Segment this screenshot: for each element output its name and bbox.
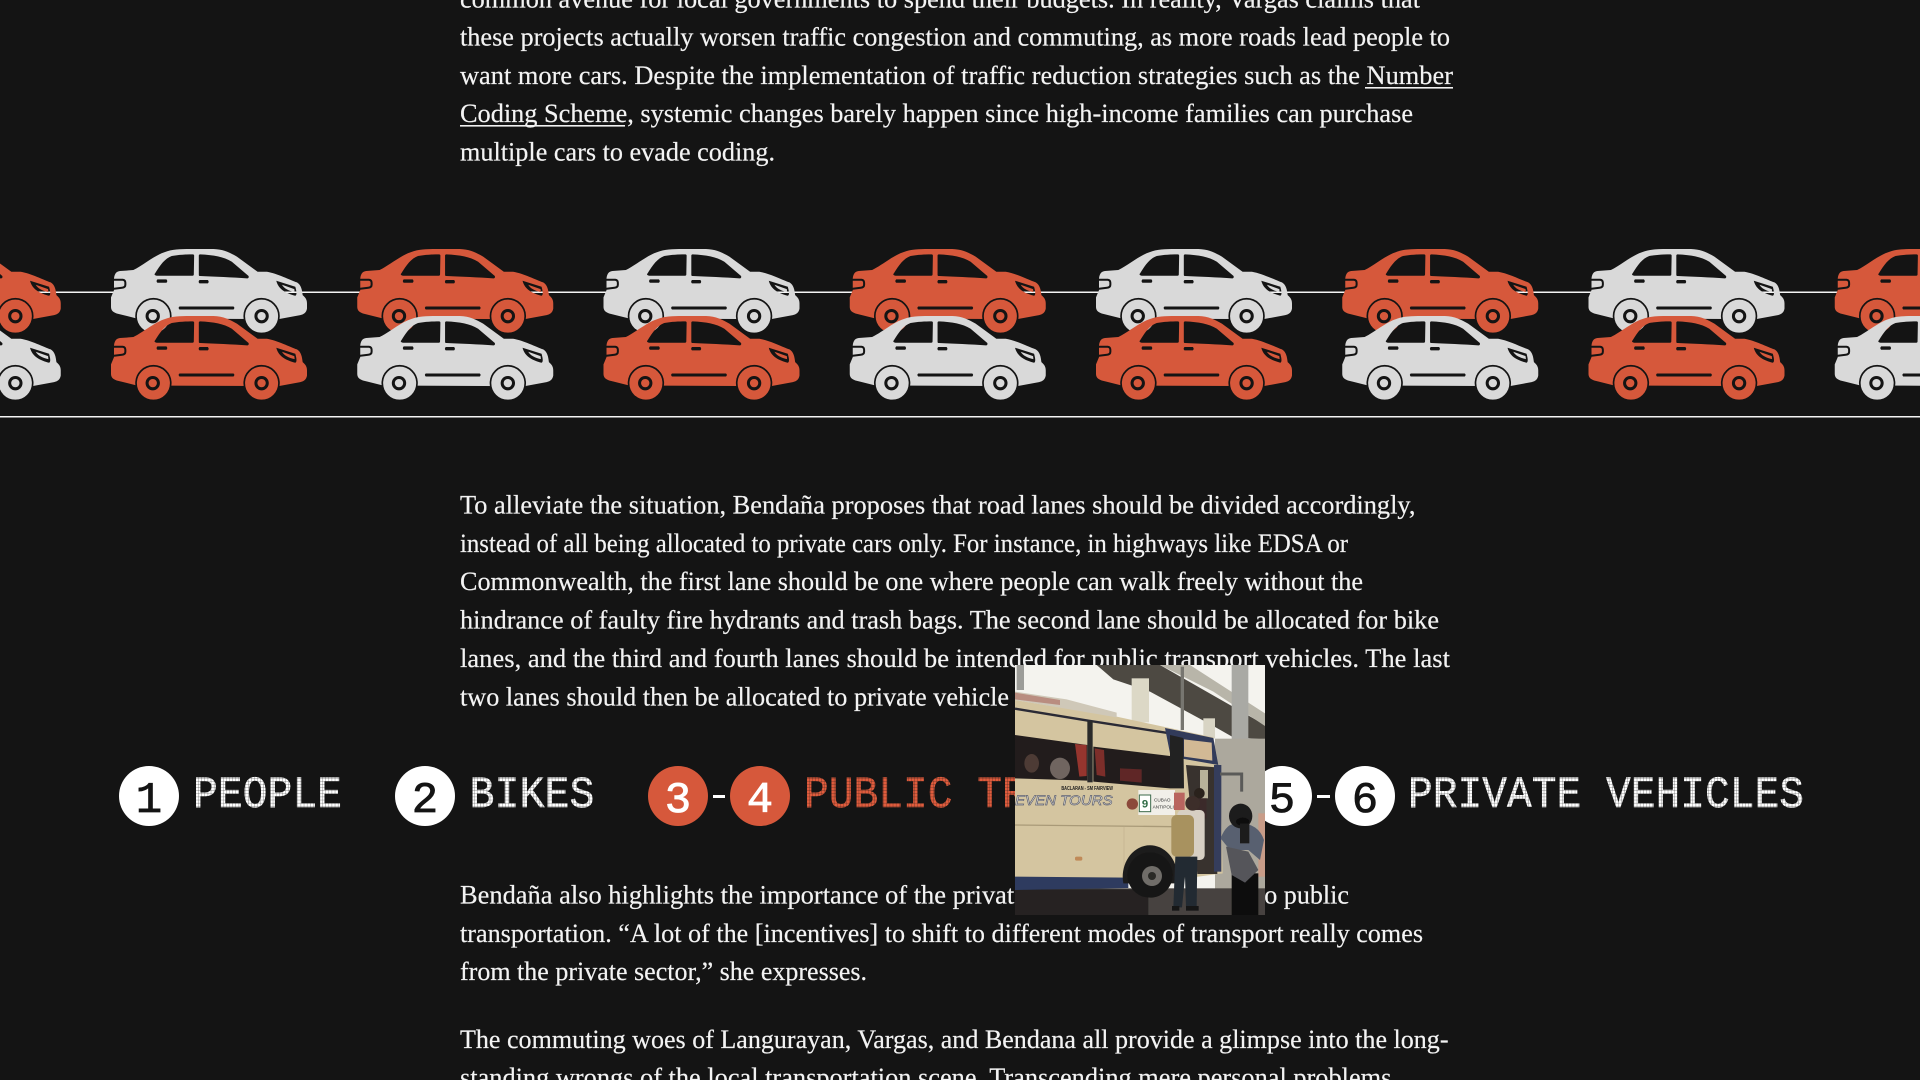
windows	[1015, 735, 1087, 781]
person in doorway	[1194, 788, 1205, 799]
text block: paragraph on road projects: these projects actually worsen traffic congestion and commuting, as more roads lead people to	[460, 22, 1450, 52]
road edge line	[0, 416, 1920, 418]
photo: passengers boarding a bus under an overpass: CUBAO	[1154, 798, 1171, 803]
text block: closing paragraph: The commuting woes of Langurayan, Vargas, and Bendana all provide a glimpse into the long-	[460, 1024, 1448, 1054]
legend item: 3-4 public transport: PUBLIC TRANSPORT	[804, 771, 1200, 821]
passenger with mask and bag	[1232, 873, 1258, 915]
text block: paragraph on road projects: Coding Scheme, systemic changes barely happen since high-income families can purchase	[460, 98, 1413, 128]
text block: paragraph on private sector: from the private sector,” she expresses.	[460, 956, 867, 986]
wheel	[1123, 845, 1177, 883]
text block: paragraph on lane allocation: Commonwealth, the first lane should be one where people can walk freely without the	[460, 566, 1363, 596]
text block: paragraph on lane allocation	[460, 490, 1451, 711]
legend item: 5-6 private vehicles: 5	[1269, 776, 1295, 826]
text block: paragraph on private sector: transportation. “A lot of the [incentives] to shift to different modes of transport really comes	[460, 918, 1423, 948]
pillars	[1132, 678, 1149, 722]
overpass	[1097, 665, 1265, 739]
text block: paragraph on lane allocation: instead of all being allocated to private cars only. For instance, in highways like EDSA or	[460, 528, 1348, 558]
photo: passengers boarding a bus under an overpass: 9	[1142, 798, 1148, 810]
text block: paragraph on private sector: Bendaña also highlights the importance of the private	[460, 880, 1026, 910]
bus front	[1170, 735, 1184, 788]
concrete wall	[1215, 739, 1265, 892]
text block: closing paragraph	[460, 1024, 1448, 1080]
text block: paragraph on lane allocation: lanes, and the third and fourth lanes should be intended for public transport vehicles. The last	[460, 643, 1451, 673]
bus body	[1015, 700, 1223, 880]
illustration: lower row of cars	[0, 316, 1920, 400]
text block: paragraph on lane allocation: two lanes should then be allocated to private vehicle	[460, 681, 1009, 711]
bus lettering: BACLARAN - SM FAIRVIEW	[1061, 786, 1113, 792]
photo: passengers boarding a bus under an overpass: ANTIPOLO	[1153, 805, 1177, 810]
legend item: 3-4 public transport: 4	[747, 776, 773, 826]
legend item: 5-6 private vehicles: 6	[1352, 776, 1378, 826]
legend item: 2 bikes: BIKES	[470, 771, 594, 821]
legend item: 3-4 public transport: 3	[665, 776, 691, 826]
photo: passengers boarding a bus under an overpass: EVEN TOURS	[1015, 792, 1113, 808]
passenger with backpack	[1177, 810, 1205, 860]
text block: paragraph on road projects: want more cars. Despite the implementation of traffic reduction strategies such as the Number	[460, 60, 1453, 90]
pink-clad passenger	[1258, 813, 1265, 877]
text block: paragraph on road projects	[460, 0, 1453, 166]
legend item: 2 bikes	[395, 766, 594, 826]
legend item: 3-4 public transport	[648, 766, 1200, 826]
text block: paragraph on private sector: to public	[1257, 880, 1349, 910]
legend item: 1 people: 1	[136, 776, 162, 826]
text block: paragraph on private sector	[460, 880, 1423, 986]
legend item: 2 bikes: 2	[412, 776, 438, 826]
legend item: 5-6 private vehicles	[1252, 766, 1804, 826]
illustration: upper row of cars	[0, 249, 1920, 334]
text block: paragraph on road projects: multiple cars to evade coding.	[460, 136, 775, 166]
legend item: 1 people: PEOPLE	[193, 771, 342, 821]
legend item: 5-6 private vehicles: PRIVATE VEHICLES	[1408, 771, 1804, 821]
sky	[1015, 665, 1265, 915]
road line behind upper cars	[0, 292, 1920, 293]
legend item: 1 people	[119, 766, 342, 826]
road	[1015, 888, 1265, 915]
blue stripe	[1015, 877, 1128, 890]
lane legend	[119, 766, 1804, 826]
text block: paragraph on lane allocation: To alleviate the situation, Bendaña proposes that road lanes should be divided accordingly,	[460, 490, 1416, 520]
photo: passengers boarding a bus under an overpass	[1015, 665, 1265, 915]
text block: paragraph on lane allocation: hindrance of faulty fire hydrants and trash bags. The second lane should be allocated for bike	[460, 605, 1439, 635]
